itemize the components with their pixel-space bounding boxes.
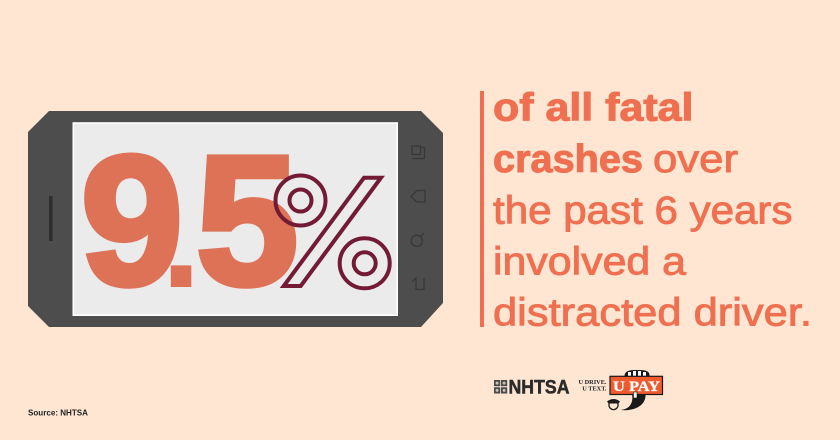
number 9.5: . xyxy=(161,156,201,318)
icon: recent apps button xyxy=(412,146,424,158)
icon: NHTSA grid xyxy=(494,380,507,394)
icon: fingers xyxy=(624,370,650,376)
line 2: over xyxy=(653,138,738,181)
icon: home button xyxy=(411,233,424,246)
statistic: 9.5 percent xyxy=(81,117,390,323)
phone body xyxy=(28,111,443,327)
accent bar xyxy=(480,91,484,327)
tagline xyxy=(578,379,607,392)
logo: U Drive. U Text. U Pay xyxy=(578,370,662,410)
line 2 xyxy=(493,138,738,181)
phone screen xyxy=(73,123,397,315)
line 2: crashes xyxy=(493,138,643,181)
icon: thumb xyxy=(620,394,646,410)
number 9.5: 5 xyxy=(196,117,298,323)
headline statement xyxy=(493,86,812,334)
icon: return button xyxy=(412,278,424,290)
logo: U Drive. U Text. U Pay: U PAY xyxy=(613,379,660,395)
U PAY badge xyxy=(610,376,662,394)
line 1: of all fatal xyxy=(493,86,694,130)
icon: speaker slot xyxy=(49,196,53,241)
icon: officer head xyxy=(609,400,618,410)
phone illustration xyxy=(28,111,443,327)
line 4: involved a xyxy=(493,240,686,284)
percent sign xyxy=(276,176,390,288)
line 3: the past 6 years xyxy=(493,190,792,232)
logo: NHTSA xyxy=(494,378,570,399)
number 9.5 xyxy=(81,117,298,323)
icon: phone in hand xyxy=(634,392,637,398)
icon: back button xyxy=(411,190,425,202)
source note: Source: NHTSA xyxy=(28,408,88,418)
number 9.5: 9 xyxy=(81,117,183,323)
NHTSA wordmark: NHTSA xyxy=(508,378,570,399)
tagline: U TEXT. xyxy=(582,386,607,392)
line 5: distracted driver. xyxy=(493,292,812,334)
tagline: U DRIVE. xyxy=(578,379,607,386)
